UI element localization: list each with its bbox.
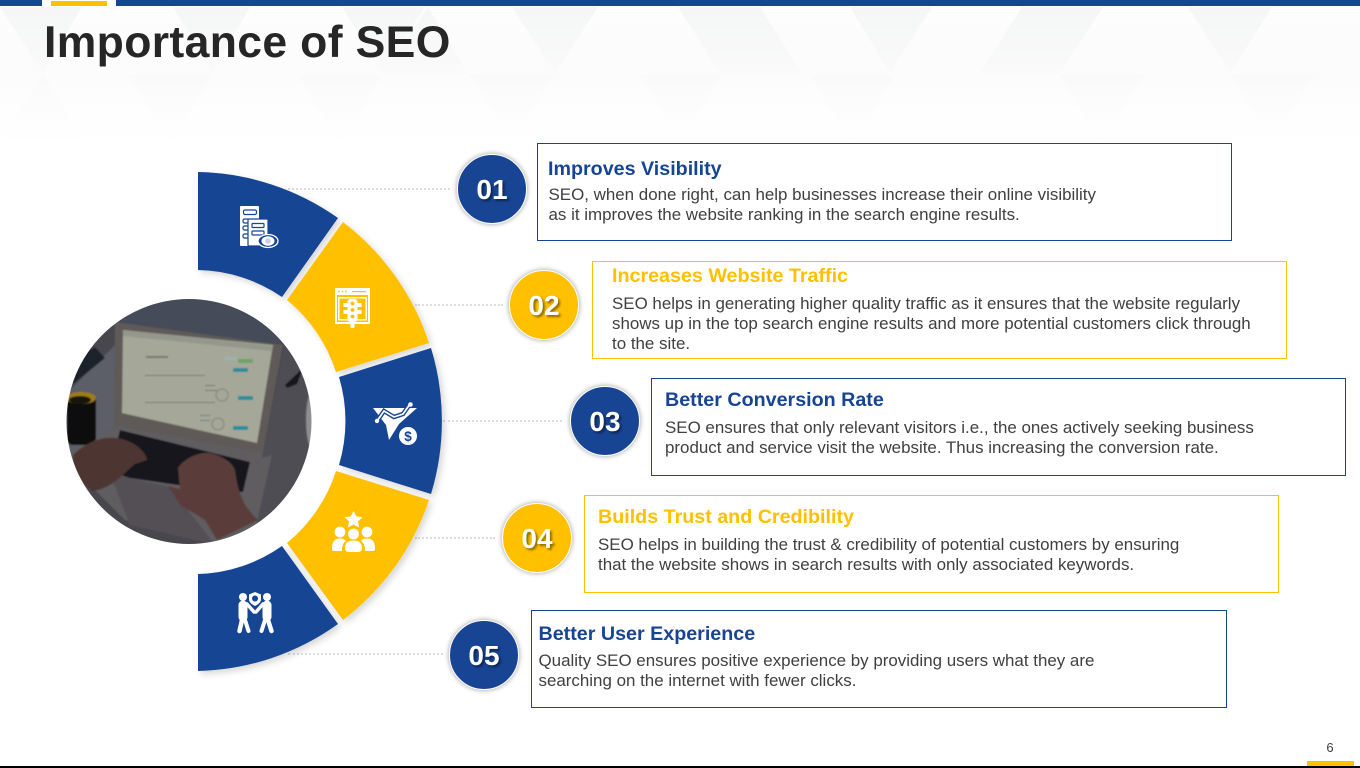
segment 3: [339, 348, 442, 494]
step 2 heading: Increases Website Traffic: [612, 265, 848, 287]
step 3 text: product and service visit the website. Thus increasing the conversion rate.: [665, 438, 1219, 457]
step 5 heading: Better User Experience: [538, 623, 755, 645]
step 3 text: [665, 418, 1254, 457]
step 4 text: [598, 535, 1179, 574]
photo: hands typing on laptop: [60, 295, 320, 550]
step 3 box: [651, 378, 1346, 476]
step 1 heading: Improves Visibility: [548, 158, 722, 180]
icon: funnel with dollar: [373, 402, 417, 445]
step 1 box: [537, 143, 1232, 241]
connector line 2: [415, 304, 503, 306]
step 5 text: Quality SEO ensures positive experience by providing users what they are: [538, 651, 1094, 670]
step 4 text: that the website shows in search results with only associated keywords.: [598, 555, 1134, 574]
step 5 text: searching on the internet with fewer clicks.: [538, 671, 856, 690]
step 1 text: SEO, when done right, can help businesses increase their online visibility: [548, 185, 1096, 204]
step 2 box: [592, 261, 1287, 359]
step 2 text: [612, 294, 1251, 353]
title: Importance of SEO: [44, 18, 451, 67]
icon: two people with shield: [239, 592, 272, 631]
step 4 number: 04: [521, 523, 553, 554]
connector line 4: [415, 537, 495, 539]
segment 1: [198, 172, 338, 297]
step 5 text: [538, 651, 1094, 690]
step 3 heading: Better Conversion Rate: [665, 389, 884, 411]
step 1 text: as it improves the website ranking in the search engine results.: [548, 205, 1020, 224]
icon: group with star: [332, 511, 375, 552]
footer accent: [1307, 761, 1354, 766]
top bar: [0, 0, 1360, 6]
step 3 text: SEO ensures that only relevant visitors i.e., the ones actively seeking business: [665, 418, 1254, 437]
footer line: [0, 766, 1360, 768]
segment 2: [287, 222, 429, 372]
step 1 number: [457, 154, 527, 224]
step 2 number: [509, 270, 579, 340]
step 5 number: 05: [468, 640, 500, 671]
segment 4: [287, 471, 429, 620]
step 4 number: [502, 503, 572, 573]
step 2 text: shows up in the top search engine results and more potential customers click through: [612, 314, 1251, 333]
step 2 number: 02: [528, 290, 560, 321]
step 2 text: SEO helps in generating higher quality traffic as it ensures that the website regularly: [612, 294, 1240, 313]
step 3 number: [570, 386, 640, 456]
step 5 number: [449, 620, 519, 690]
connector line 5: [288, 653, 443, 655]
step 4 box: [584, 495, 1279, 593]
connector line 1: [288, 188, 450, 190]
step 4 heading: Builds Trust and Credibility: [598, 506, 854, 528]
icon: browser with traffic light: [335, 288, 370, 328]
connector line 3: [443, 420, 562, 422]
step 4 text: SEO helps in building the trust & credibility of potential customers by ensuring: [598, 535, 1179, 554]
step 1 text: [548, 185, 1096, 224]
icon: documents with eye: [240, 206, 278, 248]
segment 5: [198, 546, 338, 671]
page number: 6: [1326, 740, 1334, 755]
step 2 text: to the site.: [612, 334, 690, 353]
semicircle diagram: [66, 172, 448, 676]
icon: funnel with dollar: $: [404, 429, 412, 444]
step 1 number: 01: [476, 174, 508, 205]
step 3 number: 03: [589, 406, 621, 437]
step 5 box: [531, 610, 1227, 708]
